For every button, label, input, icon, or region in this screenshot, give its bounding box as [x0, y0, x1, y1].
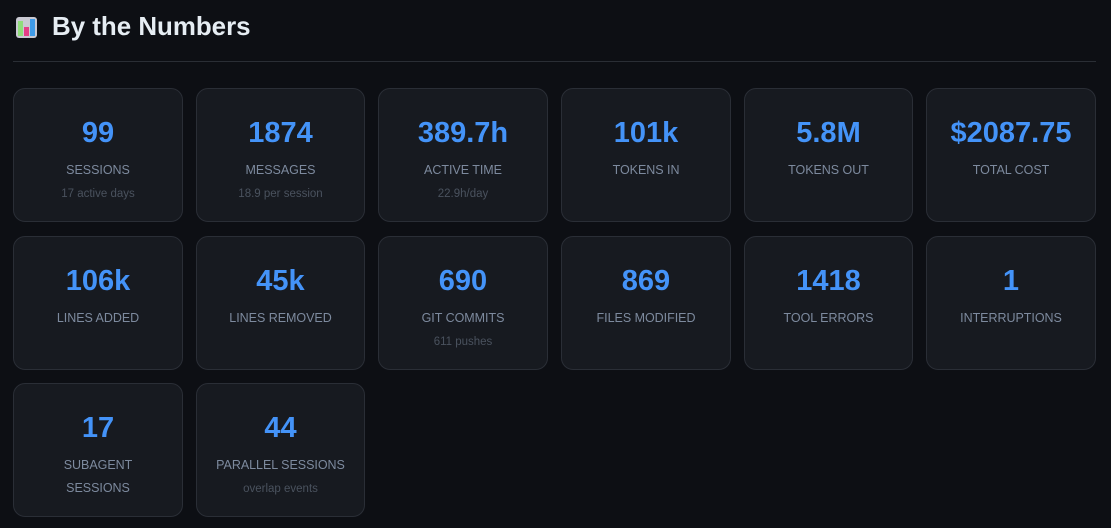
stat card: files modified: 869 — [622, 265, 670, 297]
stat card: git commits: GIT COMMITS — [422, 311, 504, 325]
stat card: subagent sessions — [13, 383, 183, 517]
stat card: lines added — [13, 236, 183, 370]
stat card: interruptions — [926, 236, 1096, 370]
stat card: total cost: $2087.75 — [951, 117, 1071, 149]
stat card: files modified: FILES MODIFIED — [597, 311, 695, 325]
stat card: tool errors — [744, 236, 913, 370]
stat card: git commits: 690 — [439, 265, 487, 297]
stat card: parallel sessions: 44 — [264, 412, 297, 444]
stat card: active time: 389.7h — [418, 117, 508, 149]
stat card: lines added: 106k — [66, 265, 130, 297]
stat card: parallel sessions: PARALLEL SESSIONS — [216, 458, 345, 472]
stat card: interruptions: INTERRUPTIONS — [960, 311, 1062, 325]
stat card: sessions: 17 active days — [61, 188, 135, 200]
stat card: sessions: SESSIONS — [66, 163, 130, 177]
stat card: total cost: TOTAL COST — [973, 163, 1049, 177]
stat card: tool errors: TOOL ERRORS — [784, 311, 873, 325]
stat card: parallel sessions — [196, 383, 365, 517]
stat card: messages — [196, 88, 365, 222]
stat card: active time: ACTIVE TIME — [424, 163, 502, 177]
stat card: git commits: 611 pushes — [434, 336, 492, 348]
stat card: lines removed — [196, 236, 365, 370]
stat card: messages: 1874 — [248, 117, 313, 149]
stat card: tokens in — [561, 88, 731, 222]
stat card: tokens in: 101k — [614, 117, 678, 149]
stat card: active time: 22.9h/day — [438, 188, 488, 200]
heading: By the Numbers — [52, 13, 251, 41]
stat card: subagent sessions: SESSIONS — [66, 481, 130, 495]
stat card: git commits — [378, 236, 548, 370]
stat card: tokens out: 5.8M — [796, 117, 861, 149]
stat card: sessions: 99 — [82, 117, 114, 149]
stat card: sessions — [13, 88, 183, 222]
stat card: lines added: LINES ADDED — [57, 311, 139, 325]
stat card: lines removed: LINES REMOVED — [229, 311, 332, 325]
stat card: tokens out — [744, 88, 913, 222]
stat card: messages: MESSAGES — [246, 163, 315, 177]
icon: bar chart emoji — [16, 17, 37, 38]
stat card: total cost — [926, 88, 1096, 222]
stat card: tool errors: 1418 — [796, 265, 861, 297]
stat card: tokens in: TOKENS IN — [613, 163, 679, 177]
stat card: subagent sessions: 17 — [82, 412, 114, 444]
stat card: parallel sessions: overlap events — [243, 483, 318, 495]
stat card: subagent sessions: SUBAGENT — [64, 458, 132, 472]
stat card: interruptions: 1 — [1003, 265, 1019, 297]
stat card: tokens out: TOKENS OUT — [788, 163, 869, 177]
stat card: active time — [378, 88, 548, 222]
stat card: messages: 18.9 per session — [238, 188, 323, 200]
stat card: lines removed: 45k — [256, 265, 305, 297]
stat card: files modified — [561, 236, 731, 370]
